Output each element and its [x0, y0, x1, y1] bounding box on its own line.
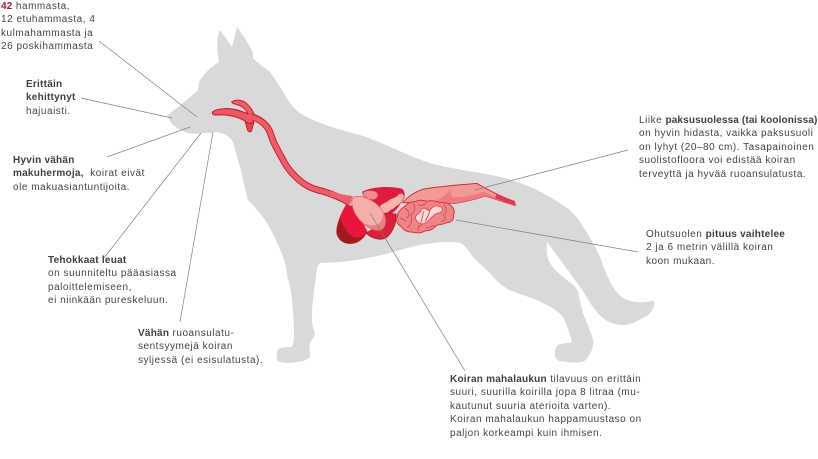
text: stomach: Koiran mahalaukun tilavuus on erittäin	[450, 374, 641, 385]
text: teeth: 42 hammasta,	[1, 1, 70, 12]
text: taste buds	[13, 155, 145, 193]
text: stomach	[450, 374, 642, 439]
text: taste buds: makuhermoja, koirat eivät	[13, 168, 145, 179]
text: saliva enzymes: sentsyymejä koiran	[138, 341, 233, 352]
text: sense of smell: Erittäin	[26, 79, 62, 90]
text: jaws	[48, 255, 177, 306]
text: stomach: kautunut suuria aterioita varten).	[450, 401, 611, 412]
icon: digestive organs	[330, 183, 515, 244]
text: small intestine: koon mukaan.	[646, 256, 715, 267]
text: jaws: Tehokkaat leuat	[48, 255, 126, 266]
text: small intestine	[646, 229, 785, 267]
text: large intestine: on hyvin hidasta, vaikka paksusuoli	[639, 128, 813, 139]
text: jaws: on suunniteltu pääasiassa	[48, 268, 177, 279]
text: saliva enzymes: Vähän ruoansulatu-	[138, 328, 234, 339]
text: large intestine: suolistofloora voi edistää koiran	[639, 155, 796, 166]
text: saliva enzymes: syljessä (ei esisulatusta).	[138, 355, 263, 366]
text: sense of smell: hajuaisti.	[26, 106, 71, 117]
icon: upper stomach	[362, 187, 405, 215]
icon: stomach	[352, 196, 385, 230]
text: teeth: kulmahammasta ja	[1, 28, 93, 39]
text: jaws: paloittelemiseen,	[48, 282, 132, 293]
text: teeth: 12 etuhammasta, 4	[1, 14, 95, 25]
text: stomach: Koiran mahalaukun happamuustaso on	[450, 414, 642, 425]
text: small intestine: Ohutsuolen pituus vaihtelee	[646, 229, 785, 240]
text: large intestine	[639, 115, 818, 180]
callout lines	[81, 41, 638, 371]
text: sense of smell: kehittynyt	[26, 92, 76, 103]
text: saliva enzymes	[138, 328, 263, 366]
icon: small intestine	[397, 200, 454, 233]
text: large intestine: terveyttä ja hyvää ruoansulatusta.	[639, 169, 806, 180]
text: teeth	[1, 1, 95, 52]
icon: large intestine	[403, 183, 515, 205]
text: stomach: suuri, suurilla koirilla jopa 8 litraa (mu-	[450, 387, 640, 398]
text: teeth: 26 poskihammasta	[1, 41, 93, 52]
icon: liver	[336, 205, 367, 244]
icon: esophagus entry	[330, 191, 353, 205]
dog silhouette	[168, 27, 654, 363]
text: jaws: ei niinkään pureskeluun.	[48, 295, 168, 306]
text: taste buds: Hyvin vähän	[13, 155, 75, 166]
text: stomach: paljon korkeampi kuin ihmisen.	[450, 428, 602, 439]
text: sense of smell	[26, 79, 76, 117]
text: large intestine: on lyhyt (20–80 cm). Tasapainoinen	[639, 142, 814, 153]
icon: lower stomach	[366, 213, 396, 239]
text: taste buds: ole makuasiantuntijoita.	[13, 182, 130, 193]
text: small intestine: 2 ja 6 metrin välillä koiran	[646, 242, 773, 253]
text: large intestine: Liike paksusuolessa (tai koolonissa)	[639, 115, 818, 126]
icon: esophagus and airway	[212, 100, 350, 203]
